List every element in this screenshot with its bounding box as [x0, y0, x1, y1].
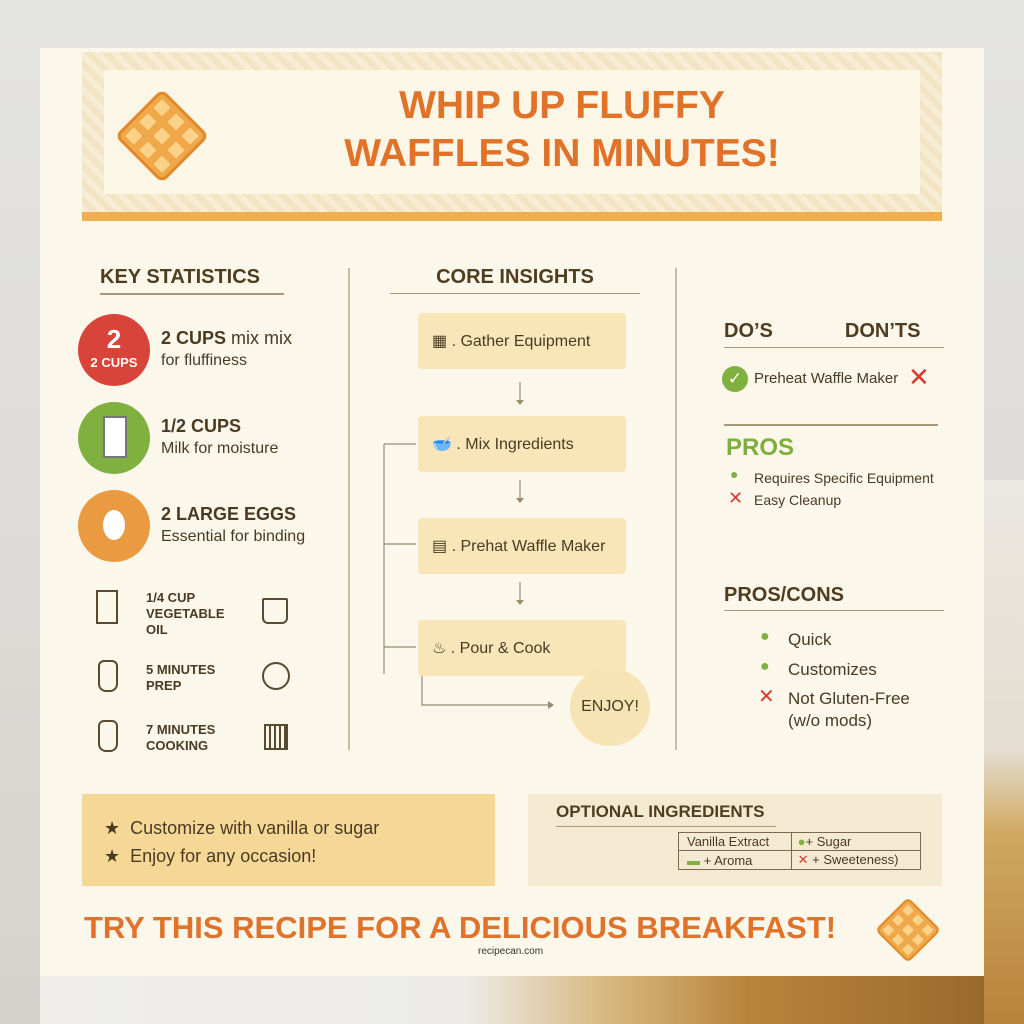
- heading: KEY STATISTICS: [100, 266, 260, 288]
- title box: [104, 70, 920, 194]
- stat: eggs: [78, 490, 305, 562]
- pros/cons: [724, 584, 944, 611]
- panel: do's and don'ts: (w/o mods): [788, 711, 872, 730]
- panel: do's and don'ts: Customizes: [788, 660, 877, 679]
- table: ✕ + Sweeteness): [798, 852, 898, 867]
- table: [678, 832, 921, 870]
- header banner: [82, 52, 942, 220]
- icon: footer waffle: [877, 899, 939, 961]
- panel: do's and don'ts: Not Gluten-Free: [788, 689, 910, 708]
- panel: do's and don'ts: ●: [760, 628, 770, 645]
- panel: do's and don'ts: Quick: [788, 630, 831, 649]
- panel: do's and don'ts: ●: [730, 466, 738, 482]
- stat: flour: [78, 314, 292, 386]
- title: WHIP UP FLUFFY: [399, 84, 725, 127]
- callout: enjoy: ENJOY!: [581, 698, 639, 715]
- stat: milk: [78, 402, 278, 474]
- step: gather: [418, 313, 626, 369]
- icon: waffle: [118, 92, 206, 180]
- icon list: 5 MINUTES: [146, 662, 215, 677]
- table: Vanilla Extract: [687, 834, 769, 849]
- icon list: 7 MINUTES: [146, 722, 215, 737]
- title: WAFFLES IN MINUTES!: [344, 132, 780, 175]
- stat: milk: 1/2 CUPS: [161, 416, 241, 436]
- panel: do's and don'ts: ✓: [728, 369, 742, 388]
- pros/cons: PROS/CONS: [724, 584, 844, 606]
- flowchart: [383, 382, 554, 709]
- stat: flour: 2: [107, 324, 121, 354]
- panel: do's and don'ts: ✕: [728, 488, 743, 508]
- panel: do's and don'ts: Requires Specific Equipment: [754, 470, 934, 486]
- panel: do's and don'ts: ✕: [908, 362, 930, 392]
- step: preheat: ▤ . Prehat Waffle Maker: [432, 538, 605, 555]
- heading: CORE INSIGHTS: [436, 266, 594, 288]
- panel: optional ingredients: [528, 794, 942, 886]
- step: gather: ▦ . Gather Equipment: [432, 333, 590, 350]
- panel: do's and don'ts: DO’S DON’TS: [724, 320, 920, 342]
- callout: tips: ★ Enjoy for any occasion!: [104, 846, 316, 866]
- step: mix: [418, 416, 626, 472]
- background food hints: [984, 480, 1024, 1024]
- panel: optional ingredients: OPTIONAL INGREDIENTS: [556, 802, 764, 821]
- table: ▬ + Aroma: [687, 852, 752, 868]
- stat: eggs: Essential for binding: [161, 528, 305, 545]
- stat: milk: Milk for moisture: [161, 440, 278, 457]
- panel: do's and don'ts: ✕: [758, 686, 775, 708]
- panel: do's and don'ts: Easy Cleanup: [754, 492, 841, 508]
- icon list: PREP: [146, 678, 181, 693]
- step: pour: ♨ . Pour & Cook: [432, 640, 550, 657]
- source credit: recipecan.com: [478, 946, 543, 957]
- stat: flour: for fluffiness: [161, 352, 247, 369]
- panel: do's and don'ts: [722, 320, 944, 730]
- step: preheat: [418, 518, 626, 574]
- heading: [100, 266, 284, 295]
- stat: flour: 2 CUPS: [91, 355, 137, 370]
- panel: do's and don'ts: Preheat Waffle Maker: [754, 370, 898, 387]
- title: [344, 84, 780, 175]
- heading: [390, 266, 640, 294]
- stat: eggs: 2 LARGE EGGS: [161, 504, 296, 524]
- icon list: OIL: [146, 622, 168, 637]
- dividers: [348, 268, 350, 750]
- table: ●+ Sugar: [798, 834, 851, 849]
- icon list: [96, 590, 290, 753]
- step: mix: 🥣 . Mix Ingredients: [432, 436, 574, 453]
- stat: flour: 2 CUPS mix mix: [161, 328, 292, 348]
- step: pour: [418, 620, 626, 676]
- callout: tips: ★ Customize with vanilla or sugar: [104, 818, 379, 838]
- icon list: 1/4 CUP: [146, 590, 195, 605]
- panel: key statistics: [78, 266, 305, 753]
- footer call to action: TRY THIS RECIPE FOR A DELICIOUS BREAKFAST!: [84, 910, 836, 945]
- callout: enjoy: [570, 668, 650, 746]
- pros: PROS: [726, 434, 794, 461]
- panel: do's and don'ts: ●: [760, 658, 770, 675]
- callout: tips: [82, 794, 495, 886]
- icon list: COOKING: [146, 738, 208, 753]
- icon list: VEGETABLE: [146, 606, 224, 621]
